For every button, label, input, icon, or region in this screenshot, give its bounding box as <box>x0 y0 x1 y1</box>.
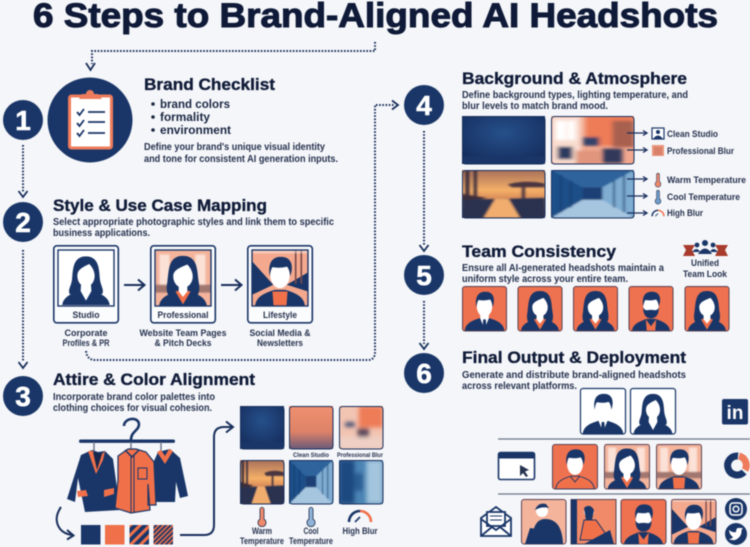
step 5 description: uniform style across your entire team. <box>462 274 628 285</box>
team headshot 2 <box>518 286 562 331</box>
step 3 description: Incorporate brand color palettes into <box>53 392 215 403</box>
output row 1 headshots <box>580 388 676 434</box>
clothing rack illustration <box>67 419 188 513</box>
use case captions <box>62 328 311 348</box>
heading: team consistency: Team Consistency <box>462 242 617 261</box>
icon: twitter <box>725 523 747 545</box>
temperature and blur labels <box>240 526 378 546</box>
card: professional <box>151 246 215 323</box>
panel: blurred office <box>551 116 634 164</box>
icon: email envelope <box>481 507 511 536</box>
arrow: swatches to backgrounds <box>180 422 233 535</box>
arrow: step 2 to step 3 <box>18 250 28 368</box>
step number 3: 3 <box>15 381 31 412</box>
divider row 1 <box>498 438 750 440</box>
step 2 description: business applications. <box>53 228 150 239</box>
step 1 description: and tone for consistent AI generation inputs. <box>144 154 338 165</box>
team headshot 1 <box>462 286 506 331</box>
step 1 description: Define your brand's unique visual identity <box>144 142 325 153</box>
divider row 2 <box>498 493 750 495</box>
icon: legend gauge <box>652 210 664 216</box>
step number 6: 6 <box>416 358 432 389</box>
step number 1 <box>3 100 43 140</box>
step 6 description: across relevant platforms. <box>462 381 577 392</box>
checklist bullets: environment <box>160 123 231 137</box>
output row 3 lifestyle headshots <box>522 499 716 544</box>
heading: style and use case mapping: Style & Use Case Mapping <box>53 196 267 215</box>
step number 5 <box>404 255 444 295</box>
step 3 description: clothing choices for visual cohesion. <box>53 403 212 414</box>
panel: navy studio <box>462 116 545 164</box>
arrow: title to step 1 <box>86 42 375 70</box>
heading: final output and deployment: Final Output & Deployment <box>462 348 686 367</box>
color swatches <box>81 525 173 544</box>
card: lifestyle: Lifestyle <box>263 310 297 320</box>
icon: linkedin <box>722 399 748 424</box>
background legend labels: Cool Temperature <box>667 192 740 203</box>
tile: warm temperature <box>240 460 284 504</box>
icon: donut logo <box>728 456 746 475</box>
icon: instagram <box>725 498 747 520</box>
tile: professional blur <box>339 406 383 449</box>
step 4 description: blur levels to match brand mood. <box>462 101 608 112</box>
checklist bullets: brand colors <box>160 97 230 111</box>
use case captions: Corporate <box>64 328 108 338</box>
step 5 description <box>462 263 664 285</box>
heading: brand checklist: Brand Checklist <box>144 75 275 94</box>
background legend arrows <box>627 130 647 216</box>
tile labels: Professional Blur <box>337 452 383 459</box>
icon: warm thermometer <box>258 507 266 527</box>
card: professional: Professional <box>158 310 208 320</box>
panel: warm sunset <box>462 170 545 218</box>
panel: cool corridor <box>551 170 634 218</box>
step 6 description <box>462 370 686 392</box>
arrow: professional to lifestyle <box>221 280 242 290</box>
team headshot 3 <box>574 286 618 331</box>
step number 5: 5 <box>416 260 432 291</box>
use case captions: Newsletters <box>257 338 303 348</box>
icon: unified team badge <box>683 240 728 256</box>
output row 2 headshots <box>552 444 702 489</box>
icon: linkedin: in <box>727 403 743 424</box>
tile labels <box>293 452 383 459</box>
card: studio <box>54 246 118 323</box>
team headshot 5 <box>685 286 729 331</box>
step number 1: 1 <box>15 105 31 136</box>
step 4 description <box>462 90 688 112</box>
arrow: step 2 to step 4 <box>86 100 398 360</box>
checklist bullets: formality <box>160 110 210 124</box>
icon: browser window <box>498 452 534 480</box>
team headshot 4 <box>629 286 673 331</box>
temperature and blur labels: High Blur <box>342 526 378 536</box>
background legend labels <box>667 129 746 219</box>
unified team look label <box>683 258 728 279</box>
background legend labels: Professional Blur <box>667 146 734 157</box>
arrow: step 5 to step 6 <box>420 301 428 349</box>
temperature and blur labels: Temperature <box>289 536 333 546</box>
tile labels: Clean Studio <box>293 452 329 459</box>
step number 6 <box>404 353 444 393</box>
arrow: step 4 to step 5 <box>420 131 428 251</box>
step 5 description: Ensure all AI-generated headshots maintain a <box>462 263 664 274</box>
temperature and blur labels: Temperature <box>240 536 284 546</box>
background legend labels: Warm Temperature <box>667 175 746 186</box>
step 3 description <box>53 392 215 414</box>
step number 3 <box>3 376 43 416</box>
step number 4: 4 <box>416 90 432 121</box>
icon: cool thermometer <box>307 507 315 527</box>
icon: clean studio <box>652 128 664 139</box>
use case captions: Social Media & <box>250 328 311 338</box>
checklist bullets <box>151 97 231 137</box>
step 2 description <box>53 217 334 239</box>
card: studio: Studio <box>72 310 100 320</box>
icon: clipboard checklist <box>48 78 132 162</box>
step 1 description <box>144 142 338 165</box>
tile: clean studio peach <box>289 406 333 449</box>
unified team look label: Team Look <box>683 269 728 279</box>
card: lifestyle <box>248 246 312 323</box>
unified team look label: Unified <box>691 258 719 268</box>
arrow: studio to professional <box>124 280 144 290</box>
heading: attire and color alignment: Attire & Color Alignment <box>53 370 255 389</box>
background legend labels: High Blur <box>667 208 703 219</box>
icon: high blur gauge <box>349 511 371 522</box>
arrow: rack to swatches <box>57 507 74 540</box>
use case captions: Website Team Pages <box>140 328 226 338</box>
background legend labels: Clean Studio <box>667 129 718 140</box>
tile: high blur <box>339 460 383 504</box>
step 2 description: Select appropriate photographic styles and link them to specific <box>53 217 334 228</box>
step number 2: 2 <box>15 207 31 238</box>
step 4 description: Define background types, lighting temperature, and <box>462 90 688 101</box>
temperature and blur labels: Cool <box>304 526 318 536</box>
temperature and blur labels: Warm <box>252 526 272 536</box>
heading: background and atmosphere: Background & Atmosphere <box>462 69 687 88</box>
tile: clean studio navy <box>240 406 284 449</box>
arrow: step 1 to step 2 <box>18 145 28 197</box>
step number 4 <box>404 85 444 125</box>
use case captions: Profiles & PR <box>62 338 110 348</box>
step 6 description: Generate and distribute brand-aligned headshots <box>462 370 686 381</box>
icon: professional blur <box>652 145 664 156</box>
use case captions: & Pitch Decks <box>154 338 212 348</box>
step number 2 <box>3 202 43 242</box>
icon: legend cool thermometer <box>655 190 661 204</box>
tile: cool temperature <box>289 460 333 504</box>
icon: legend warm thermometer <box>655 173 661 187</box>
